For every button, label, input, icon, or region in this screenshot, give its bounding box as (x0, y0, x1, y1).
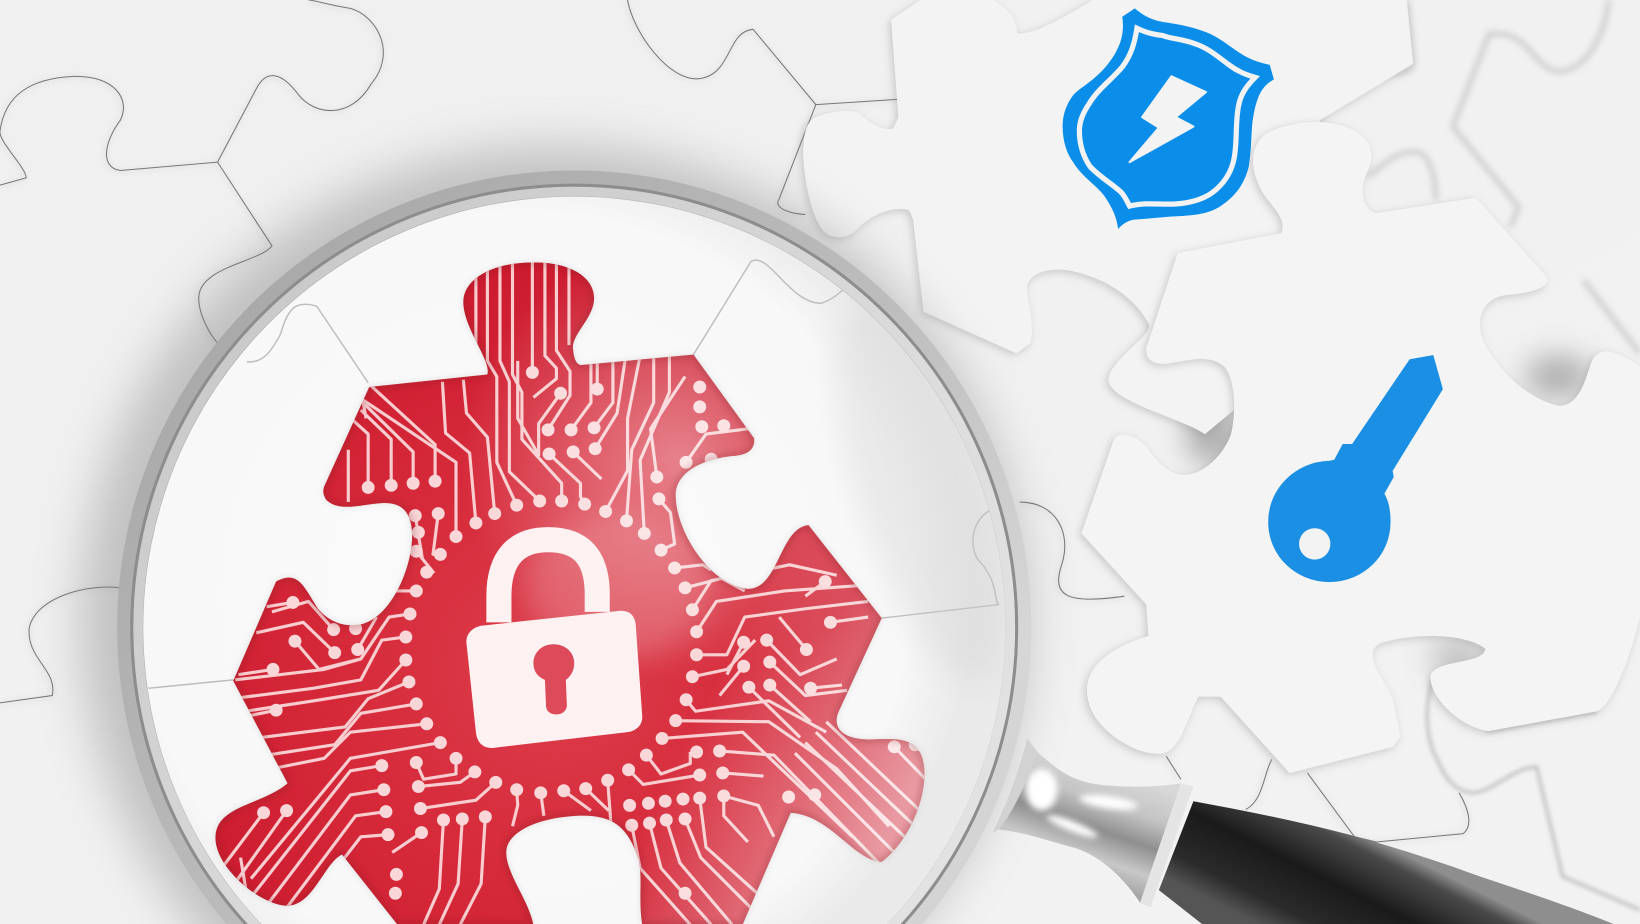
magnifier ring (117, 171, 1031, 924)
dark gaps around the raised key piece (1186, 356, 1592, 669)
circuit pads (257, 366, 922, 900)
icon: blue key (1269, 356, 1442, 582)
ring inner band (138, 191, 1010, 924)
left traces (232, 591, 440, 879)
raised puzzle piece: key (1081, 122, 1640, 773)
icon: blue shield with lightning bolt (1063, 8, 1274, 229)
icon: white padlock (466, 540, 642, 748)
handle: ferrule end ring (1140, 783, 1193, 907)
handle: silver ferrule (999, 752, 1181, 907)
raised puzzle piece: shield (803, 0, 1413, 434)
inner shadow along the puzzle hole edge (215, 262, 924, 924)
padlock keyhole (533, 644, 574, 714)
glass reflection over the circuit (481, 285, 924, 924)
padlock shackle (499, 540, 597, 622)
seams between the pieces under the lens (149, 260, 999, 688)
top traces (361, 261, 570, 537)
circuit traces (222, 261, 936, 924)
upper left traces (345, 377, 440, 573)
magnifier handle (993, 738, 1615, 924)
red circuit board visible through the puzzle hole (199, 251, 952, 924)
padlock body (466, 611, 642, 748)
right traces (629, 565, 889, 894)
ring groove (132, 185, 1017, 924)
right hatch traces (795, 722, 936, 852)
hole shadow on the white pieces (215, 262, 924, 924)
lens shadow (82, 146, 1027, 924)
lens glass: enlarged white pieces (143, 197, 1005, 924)
glass tint near the right rim (836, 314, 994, 664)
lower right raised puzzle piece edges (1427, 680, 1640, 910)
bottom traces (392, 758, 753, 924)
handle: ferrule highlights (1026, 769, 1139, 841)
recessed shadows in the upper right (1320, 0, 1640, 354)
handle: black grip (1159, 801, 1615, 924)
lower left traces (224, 765, 382, 906)
lens contents (149, 251, 1042, 924)
handle: ferrule collar (993, 738, 1038, 833)
